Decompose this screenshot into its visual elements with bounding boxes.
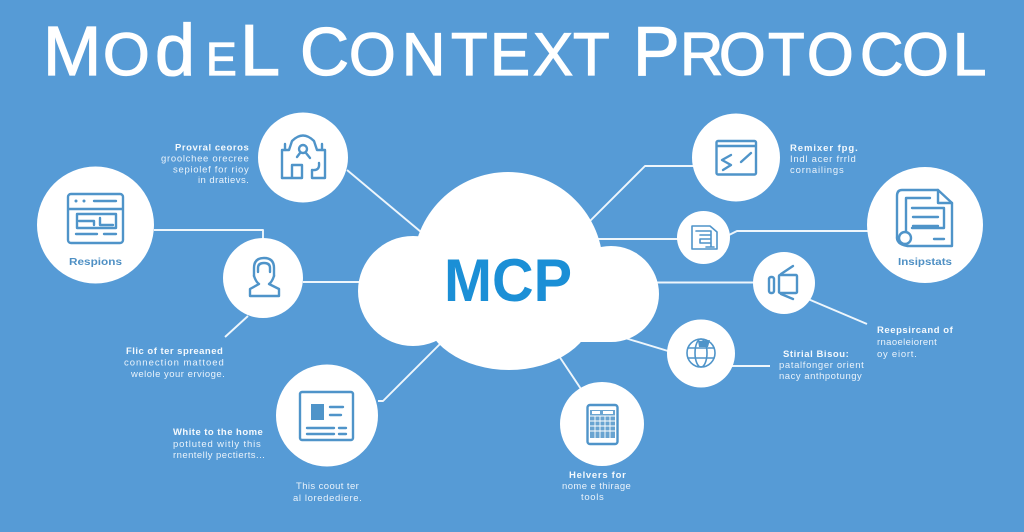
text: bottom-left caption: White to the home [173,427,263,438]
title: M [43,12,101,90]
text: top-right caption: cornailings [790,165,844,176]
title: C [300,14,349,90]
title: L [240,11,280,91]
text: top-right caption [790,143,858,176]
panel: tablet node [560,382,644,503]
icon: globe [687,339,715,367]
title: E [206,33,237,85]
icon: news article [300,392,353,440]
central cloud: MCP [358,172,659,370]
text: tablet caption: tools [581,492,604,503]
text: top-right caption: Remixer fpg. [790,143,858,154]
panel: Respions node [37,166,154,284]
panel: top-right node [692,114,858,202]
label: Respions: Respions [69,257,123,268]
panel: globe node [667,320,735,388]
text: tablet caption [562,470,631,503]
title: O [349,21,396,88]
icon: megaphone [769,266,797,299]
title: N [402,21,445,88]
icon: building with lock [282,136,325,178]
text: globe caption: patalfonger orient [779,360,864,371]
text: top-left caption [161,142,249,186]
panel: top-left node [161,112,348,202]
title: O [902,21,949,88]
MCP label: MCP [444,247,572,314]
title: O [719,21,766,88]
panel: small document node [677,211,730,264]
title: T [451,21,488,88]
icon: code window [716,141,756,174]
title: X [533,21,573,88]
title: P [633,12,680,90]
icon: stacked documents [692,226,717,249]
text: bottom caption: This coout ter [296,481,359,492]
text: globe caption [779,349,864,382]
label: Insipstats: Insipstats [898,257,952,268]
title: O [103,21,150,88]
icon: browser window [68,194,123,243]
title: L [953,21,986,88]
title: O [807,21,854,88]
connector lines [154,166,868,401]
text: right caption: oy eiort. [877,349,917,360]
panel: bottom-left node [276,364,378,466]
text: tablet caption: nome e thirage [562,481,631,492]
title: d [155,11,195,91]
text: top-left caption: sepiolef for rioy [173,164,249,176]
text: left-middle caption: connection mattoed [124,358,224,368]
panel: Insipstats node [867,167,983,283]
title: T [768,21,805,88]
text: top-left caption: in dratievs. [198,175,249,186]
title: R [680,21,723,88]
panel: left-middle node [223,238,303,318]
text: bottom caption [293,481,362,504]
icon: person with padlock [250,258,279,296]
title: T [573,21,610,88]
text: tablet caption: Helvers for [569,470,626,481]
icon: document with badge [897,190,952,246]
text: globe caption: Stirial Bisou: [783,349,849,360]
text: globe caption: nacy anthpotungy [779,371,862,382]
icon: tablet calendar [588,405,618,444]
title [43,11,986,91]
text: right caption: rnaoeleiorent [877,337,937,348]
panel: megaphone node [753,252,815,314]
text: top-right caption: Indl acer frrld [790,154,856,165]
title: C [860,21,903,88]
text: left-middle caption: welole your ervioge. [130,369,225,380]
text: right caption: Reepsircand of [877,325,954,336]
text: bottom caption: al loredediere. [293,493,362,504]
text: left-middle caption: Flic of ter spreaned [126,346,223,357]
text: top-left caption: Provral ceoros [175,142,249,154]
title: E [490,21,530,88]
text: right caption [877,325,954,360]
text: top-left caption: groolchee orecree [161,154,249,164]
text: bottom-left caption: potluted witly this [173,439,261,450]
text: bottom-left caption: rnentelly pectierts... [173,450,265,461]
text: bottom-left caption [173,427,265,461]
text: left-middle caption [124,346,225,380]
